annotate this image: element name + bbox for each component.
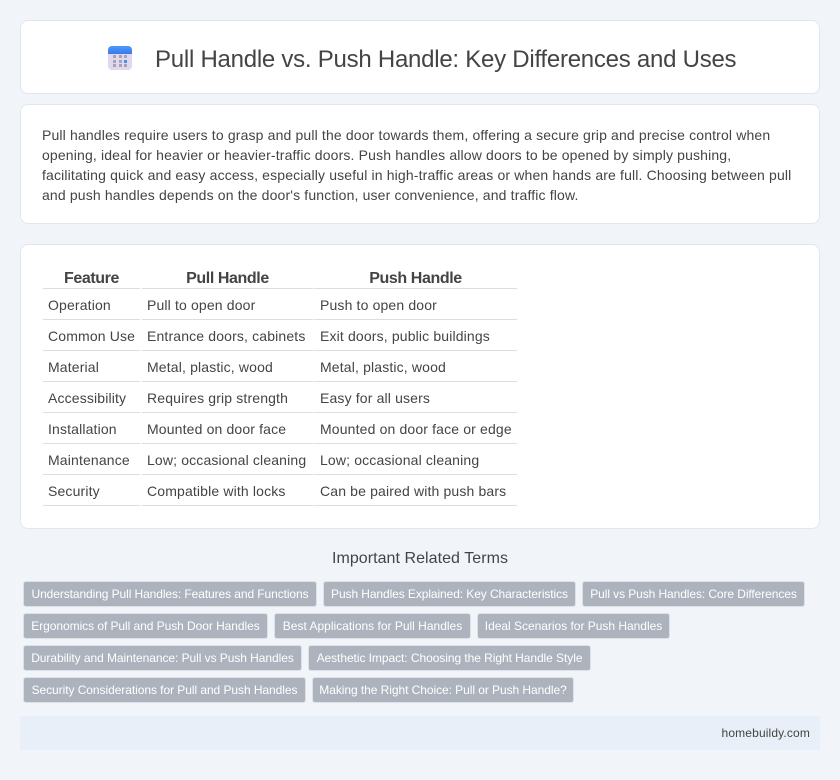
table rows: Installation — [48, 421, 117, 437]
table rows: Easy for all users — [320, 390, 430, 406]
table rows: Metal, plastic, wood — [320, 359, 446, 375]
table rows: Accessibility — [48, 390, 126, 406]
table rows: Entrance doors, cabinets — [147, 328, 305, 344]
header panel — [20, 20, 820, 94]
table rows: Low; occasional cleaning — [147, 452, 306, 468]
table rows: Mounted on door face — [147, 421, 286, 437]
table rows: Exit doors, public buildings — [320, 328, 490, 344]
table rows: Compatible with locks — [147, 483, 286, 499]
table rows: Requires grip strength — [147, 390, 288, 406]
table rows: Low; occasional cleaning — [320, 452, 479, 468]
table header: Feature — [64, 270, 119, 287]
table header: Push Handle — [369, 270, 462, 287]
icon: calendar — [108, 46, 132, 70]
panel: intro paragraph — [20, 104, 820, 224]
related terms tags: Pull vs Push Handles: Core Differences — [590, 587, 797, 601]
intro text: Pull handles require users to grasp and pull the door towards them, offering a secure grip and precise control when — [42, 127, 770, 143]
footer bar — [20, 716, 820, 750]
table header — [64, 270, 462, 287]
table rows — [48, 297, 512, 499]
related terms tags — [23, 581, 805, 703]
related terms tags: Understanding Pull Handles: Features and Functions — [32, 587, 308, 601]
title: Pull Handle vs. Push Handle: Key Differences and Uses — [155, 46, 736, 73]
related terms tags: Best Applications for Pull Handles — [283, 619, 462, 633]
related terms tags: Ergonomics of Pull and Push Door Handles — [31, 619, 260, 633]
table rows: Can be paired with push bars — [320, 483, 506, 499]
related terms tags: Durability and Maintenance: Pull vs Push Handles — [31, 651, 294, 665]
footer credit: homebuildy.com — [722, 726, 810, 740]
intro text: facilitating quick and easy access, especially useful in high-traffic areas or when hands are full. Choosing between pull — [42, 167, 791, 183]
table rows: Security — [48, 483, 100, 499]
table rows: Operation — [48, 297, 111, 313]
panel: comparison table — [20, 244, 820, 529]
table rows: Maintenance — [48, 452, 130, 468]
related terms tags: Push Handles Explained: Key Characteristics — [331, 587, 568, 601]
table rows: Common Use — [48, 328, 135, 344]
table rows: Metal, plastic, wood — [147, 359, 273, 375]
related terms tags: Security Considerations for Pull and Push Handles — [32, 683, 297, 697]
table rows: Material — [48, 359, 99, 375]
table header: Pull Handle — [186, 270, 269, 287]
table rows: Pull to open door — [147, 297, 255, 313]
intro text — [42, 127, 791, 203]
related terms tags: Aesthetic Impact: Choosing the Right Handle Style — [317, 651, 582, 665]
related terms tags: Ideal Scenarios for Push Handles — [485, 619, 662, 633]
related terms heading: Important Related Terms — [332, 550, 508, 567]
related terms tags: Making the Right Choice: Pull or Push Handle? — [319, 683, 567, 697]
table rows: Push to open door — [320, 297, 437, 313]
intro text: and push handles depends on the door's function, user convenience, and traffic flow. — [42, 187, 578, 203]
intro text: opening, ideal for heavier or heavier-traffic doors. Push handles allow doors to be opened by simply pushing, — [42, 147, 731, 163]
table rows: Mounted on door face or edge — [320, 421, 512, 437]
